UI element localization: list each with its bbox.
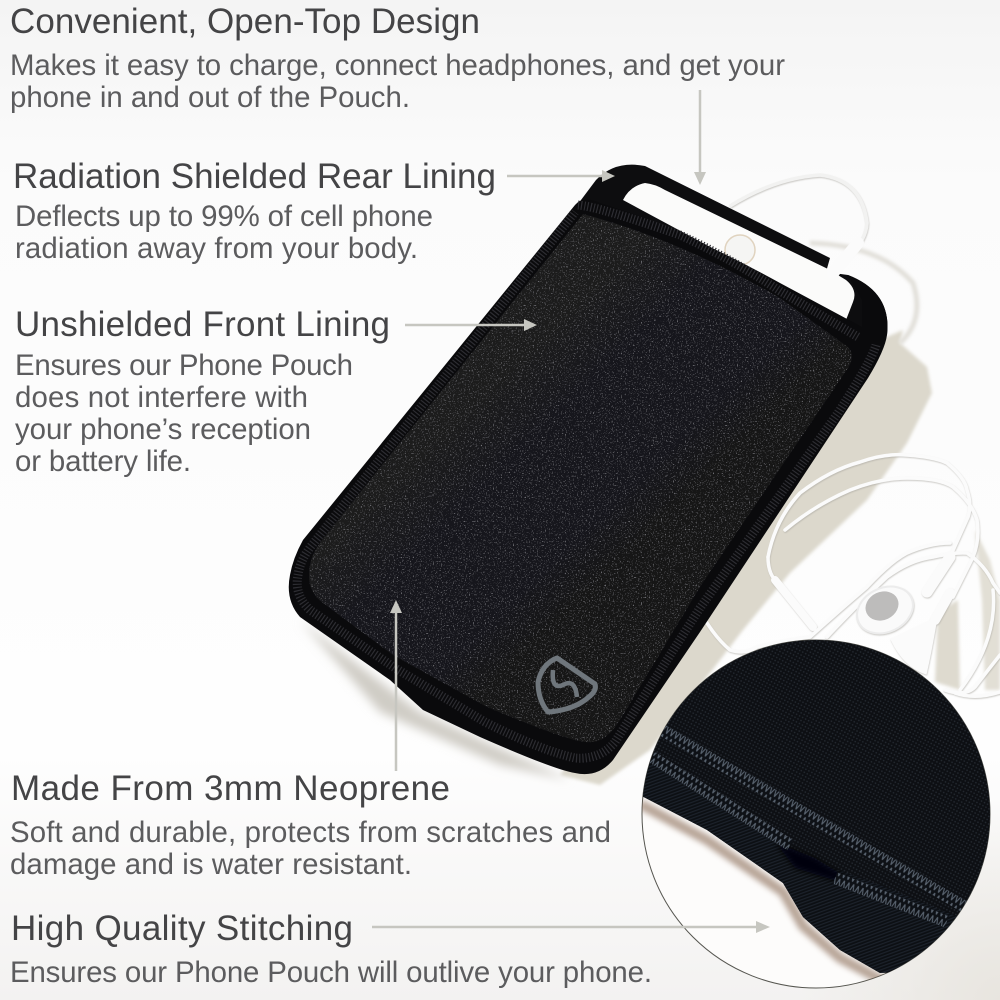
heading: front lining: Unshielded Front Lining <box>15 305 390 344</box>
text: front lining description: or battery life. <box>15 445 191 478</box>
brand shield logo <box>538 658 595 712</box>
text: open-top description: phone in and out of the Pouch. <box>10 81 410 114</box>
text: front lining description <box>15 349 353 478</box>
pouch rear panel <box>572 165 888 345</box>
magnified binding <box>643 759 956 973</box>
seam stitching <box>297 205 876 758</box>
text: stitching description: Ensures our Phone Pouch will outlive your phone. <box>10 956 652 989</box>
earphone cable at top <box>730 175 867 255</box>
magnified stitching circle <box>630 630 1000 988</box>
arrow: stitching <box>372 921 770 933</box>
magnified lower stitches right <box>833 872 949 927</box>
magnified lower stitches left <box>649 752 794 850</box>
magnified fabric <box>630 630 1000 973</box>
pouch <box>289 165 888 774</box>
text: rear lining description: radiation away from your body. <box>15 232 418 265</box>
text: neoprene description: damage and is water resistant. <box>10 848 412 881</box>
text: rear lining description: Deflects up to 99% of cell phone <box>15 200 433 233</box>
phone inside pouch <box>623 183 854 320</box>
arrow: open top <box>694 90 706 185</box>
heading: neoprene: Made From 3mm Neoprene <box>11 769 450 808</box>
heading: open-top design: Convenient, Open-Top Design <box>10 2 480 41</box>
text: neoprene description <box>10 816 611 881</box>
magnified shadow under binding <box>640 804 885 982</box>
text: front lining description: Ensures our Phone Pouch <box>15 349 353 382</box>
text: open-top description: Makes it easy to charge, connect headphones, and get your <box>10 49 785 82</box>
text: front lining description: your phone’s reception <box>15 413 311 446</box>
pouch front panel <box>289 199 888 774</box>
text: open-top description <box>10 49 785 114</box>
text: rear lining description <box>15 200 433 265</box>
text: front lining description: does not interfere with <box>15 381 308 414</box>
arrow: front lining <box>405 319 537 331</box>
earphones with coiled cables <box>707 455 1000 696</box>
pouch fabric face <box>309 214 852 742</box>
magnified upper stitches <box>659 725 968 912</box>
headphone plug <box>833 243 858 273</box>
magnified dark pinch <box>776 844 849 882</box>
heading: rear lining: Radiation Shielded Rear Lining <box>13 157 496 196</box>
cast shadow of pouch <box>300 243 1000 785</box>
text: neoprene description: Soft and durable, protects from scratches and <box>10 816 611 849</box>
arrow: neoprene <box>390 600 402 771</box>
heading: stitching: High Quality Stitching <box>11 909 353 948</box>
arrow: rear lining <box>507 170 615 182</box>
